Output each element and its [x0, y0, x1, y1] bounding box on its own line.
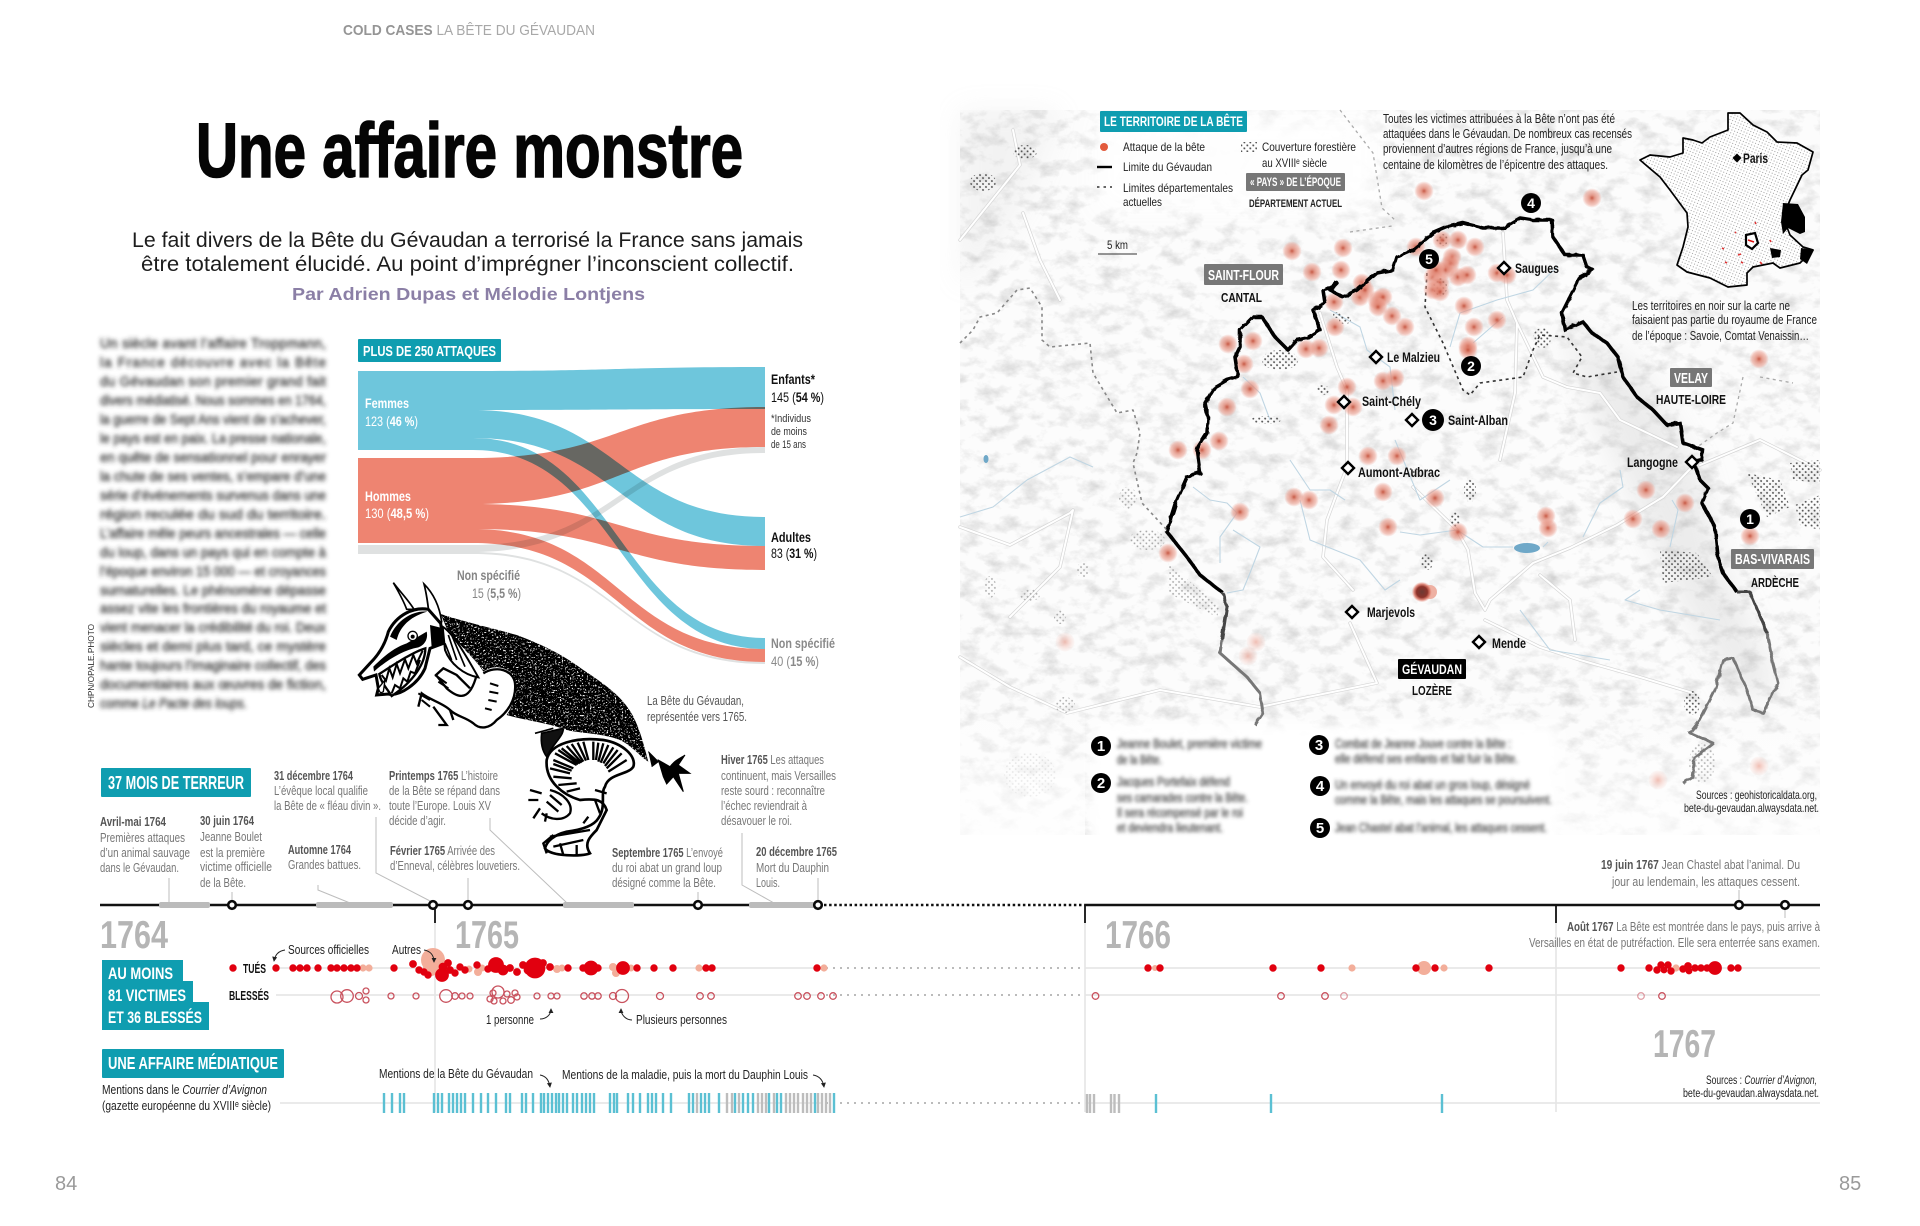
event: automne 1764: Grandes battues. [288, 858, 361, 872]
blurred article text: la guerre de Sept Ans vient de s’achever, [100, 412, 326, 427]
dots: autres sources [359, 948, 1680, 977]
horns [393, 583, 442, 623]
leader lines [169, 817, 1785, 918]
dots: tués, sources officielles [230, 958, 1741, 982]
year labels: 1766 [1105, 914, 1171, 957]
tag: 37 mois de terreur: 37 MOIS DE TERREUR [108, 773, 244, 793]
town names: Saint-Chély [1362, 394, 1421, 409]
annotation: sources officielles [274, 943, 369, 961]
town names [1358, 261, 1678, 651]
row labels: TUÉS [243, 961, 266, 976]
sources: timeline: Sources : Courrier d’Avignon, [1706, 1075, 1817, 1087]
media description: Mentions dans le Courrier d’Avignon [102, 1083, 267, 1097]
event: août 1767: Versailles en état de putréfaction. Elle sera enterrée sans examen. [1529, 936, 1820, 950]
label: velay [1656, 368, 1726, 407]
byline: Par Adrien Dupas et Mélodie Lontjens [292, 284, 645, 304]
blurred article text: surnaturelles. Le phénomène dépasse [100, 583, 326, 598]
numbered badges on map [1419, 193, 1760, 529]
label: bas-vivarais [1731, 549, 1814, 590]
media description [102, 1083, 271, 1113]
blurred article text: siècles et demi plus tard, ce mystère [100, 639, 326, 654]
event: 30 juin 1764: de la Bête. [200, 876, 246, 890]
label: saint-flour: SAINT-FLOUR [1208, 268, 1279, 284]
towns [1338, 262, 1698, 648]
event: printemps 1765 [389, 769, 500, 828]
key: blurred captions: elle défend ses enfants et fait fuir la Bête. [1335, 752, 1518, 766]
key: numbered badges: 1 [1097, 738, 1105, 755]
label: non spécifié centre [457, 567, 521, 601]
row lines [276, 968, 1820, 1103]
map panel: le territoire de la bête [960, 110, 1820, 849]
label: velay: HAUTE-LOIRE [1656, 392, 1726, 407]
tag: au moins 81 victimes: ET 36 BLESSÉS [108, 1008, 202, 1027]
callout: victimes: proviennent d’autres régions de France, jusqu’à une [1383, 142, 1612, 156]
annotation: sources officielles: Sources officielles [288, 943, 369, 957]
annotation: mentions de la bête [379, 1067, 550, 1087]
event: 20 décembre 1765: 20 décembre 1765 [756, 845, 837, 859]
blurred article text: comme Le Pacte des loups. [100, 696, 247, 711]
blurred article text: L’affaire mêle peurs ancestrales — celle [100, 526, 326, 541]
label: enfants: *Individus [771, 413, 811, 425]
key: blurred captions: de la Bête. [1117, 753, 1162, 767]
tag: 37 mois de terreur [101, 768, 251, 797]
caption: la bête [647, 693, 747, 724]
blurred article text: vient menacer la crédibilité du roi. Deux [100, 620, 326, 635]
label: adultes: Adultes [771, 529, 811, 545]
label: bas-vivarais: BAS-VIVARAIS [1735, 552, 1810, 568]
label: femmes: Femmes [365, 396, 409, 411]
tag: au moins 81 victimes: AU MOINS [108, 964, 173, 983]
annotation: autres: Autres [392, 943, 421, 957]
town names: Saugues [1515, 261, 1559, 276]
blurred article text: la chute de ses ventes, s’empare d’une [100, 469, 326, 484]
label: enfants: de 15 ans [771, 439, 806, 451]
callout: territoires en noir: de l’époque : Savoie, Comtat Venaissin… [1632, 329, 1809, 343]
town names: Mende [1492, 636, 1526, 651]
map tag: le territoire de la bête [1100, 111, 1247, 132]
row labels [229, 961, 269, 1003]
victims chart [102, 943, 1820, 1103]
label: bas-vivarais: ARDÈCHE [1751, 575, 1799, 590]
faint forest cover [984, 487, 1220, 797]
sankey nodes and flows [358, 367, 765, 664]
blurred article text: la France découvre avec la Bête [100, 355, 326, 370]
callout: victimes: Toutes les victimes attribuées à la Bête n’ont pas été [1383, 112, 1615, 126]
legend: pays de l'époque [1246, 173, 1345, 191]
legend: limite [1097, 160, 1212, 174]
map tag: le territoire de la bête: LE TERRITOIRE DE LA BÊTE [1104, 114, 1243, 129]
lake [984, 455, 1540, 553]
event: printemps 1765: décide d’agir. [389, 814, 446, 828]
body [441, 614, 648, 762]
label: non spécifié centre: 15 (5,5 %) [472, 585, 521, 601]
gévaudan in inset [1746, 233, 1758, 249]
key: blurred captions: comme la Bête, mais les attaques se poursuivent. [1335, 793, 1552, 807]
event: 30 juin 1764: est la première [200, 846, 265, 860]
annotation: plusieurs personnes [621, 1009, 727, 1027]
event: automne 1764 [288, 843, 361, 872]
callout: territoires en noir: faisaient pas partie du royaume de France [1632, 313, 1817, 327]
label: non spécifié droite: Non spécifié [771, 635, 835, 651]
standfirst: Le fait divers de la Bête du Gévaudan a terrorisé la France sans jamais [132, 229, 803, 252]
event: août 1767: Août 1767 La Bête est montrée dans le pays, puis arrive à [1567, 920, 1820, 934]
legend: couverture forestière: Couverture forestière [1262, 140, 1356, 154]
numbered badges on map: 5 [1425, 251, 1433, 267]
event: 19 juin 1767: 19 juin 1767 Jean Chastel abat l’animal. Du [1601, 858, 1800, 872]
event: avril-mai 1764: Avril-mai 1764 [100, 815, 166, 829]
event: 20 décembre 1765: Mort du Dauphin [756, 861, 829, 875]
tag: une affaire médiatique: UNE AFFAIRE MÉDIATIQUE [108, 1052, 278, 1073]
scale bar [1098, 238, 1137, 254]
event: 30 juin 1764 [200, 814, 272, 890]
header: running head: COLD CASES LA BÊTE DU GÉVAUDAN [343, 22, 595, 39]
key: numbered badges: 2 [1097, 775, 1105, 792]
high ground shading [960, 110, 1060, 290]
départemental limits [960, 110, 1793, 530]
town names: Saint-Alban [1448, 413, 1508, 428]
key: blurred captions: Combat de Jeanne Jouve contre la Bête : [1335, 737, 1511, 751]
label: enfants: 145 (54 %) [771, 389, 824, 405]
jaws and teeth [379, 648, 425, 696]
blurred article text: Un siècle avant l’affaire Troppmann, [100, 336, 326, 351]
event: février 1765 [390, 844, 520, 873]
key: blurred captions: Jeanne Boulet, première victime [1117, 737, 1262, 751]
circles: blessés [331, 986, 1665, 1004]
key: blurred captions [1117, 737, 1552, 835]
blurred article text: hante toujours l’imaginaire collectif, des [100, 658, 326, 673]
territories in black [1770, 203, 1814, 264]
blurred article text: documentaires aux œuvres de fiction, [100, 677, 326, 692]
label: velay: VELAY [1674, 371, 1708, 387]
blurred article text: en quête de sensationnel pour enrayer [100, 450, 326, 465]
blurred article text: du Gévaudan son premier grand fait [100, 374, 326, 389]
rear thigh and leg [545, 739, 634, 855]
event: hiver 1765: l’échec reviendrait à [721, 799, 807, 813]
main time axis [100, 901, 1820, 1112]
blurred article text [100, 336, 326, 711]
label: enfants: de moins [771, 426, 807, 438]
label: hommes: 130 (48,5 %) [365, 506, 429, 521]
label: adultes: 83 (31 %) [771, 545, 817, 561]
label: saint-flour: CANTAL [1221, 290, 1262, 305]
numbered badges on map: 4 [1527, 195, 1535, 211]
event: août 1767 [1529, 920, 1820, 950]
blurred article text: le pays est en paix. La presse nationale, [100, 431, 326, 446]
row labels: BLESSÉS [229, 988, 269, 1003]
event: 30 juin 1764: victime officielle [200, 860, 272, 874]
event: 31 décembre 1764 [274, 769, 381, 813]
key: numbered badges [1091, 735, 1330, 838]
tag: une affaire médiatique [102, 1049, 284, 1078]
inset map: france [1640, 113, 1814, 287]
year labels [100, 914, 1716, 1066]
legend [1097, 140, 1356, 210]
label: adultes [771, 529, 817, 561]
event: hiver 1765: reste sourd : reconnaître [721, 784, 825, 798]
numbered badges on map: 1 [1746, 511, 1754, 527]
callout: victimes: centaine de kilomètres de l’épicentre des attaques. [1383, 158, 1608, 172]
annotation: mentions de la maladie: Mentions de la maladie, puis la mort du Dauphin Louis [562, 1068, 808, 1082]
tag: plus de 250 attaques [358, 339, 501, 362]
blurred article text: série d’événements survenus dans une [100, 488, 326, 503]
key: blurred captions: Il sera récompensé par le roi [1117, 806, 1243, 820]
event: septembre 1765: désigné comme la Bête. [612, 876, 716, 890]
rivers [960, 267, 1720, 660]
timeline: 37 mois de terreur [100, 753, 1820, 1112]
sources: timeline: bete-du-gevaudan.alwaysdata.net. [1683, 1088, 1819, 1100]
key: numbered badges: 5 [1316, 820, 1324, 837]
sources: map: Sources : geohistoricaldata.org, [1696, 788, 1817, 802]
event: février 1765: d’Enneval, célèbres louvetiers. [390, 859, 520, 873]
paris [1732, 151, 1768, 166]
illustration: la bête [359, 583, 690, 855]
event: 19 juin 1767 [1601, 858, 1800, 889]
event: 31 décembre 1764: 31 décembre 1764 [274, 769, 353, 783]
town names: Langogne [1627, 455, 1678, 470]
media description: (gazette européenne du XVIIIᵉ siècle) [102, 1099, 271, 1113]
key: numbered badges: 4 [1316, 778, 1325, 795]
callout: victimes: attaquées dans le Gévaudan. De nombreux cas recensés [1383, 127, 1632, 141]
key: numbered badges: 3 [1315, 737, 1323, 754]
legend: couverture forestière [1241, 140, 1356, 170]
annotation: mentions de la bête: Mentions de la Bête du Gévaudan [379, 1067, 533, 1081]
annotation: autres [392, 943, 434, 962]
bars: mentions bleues [384, 1093, 1442, 1113]
numbered badges on map: 3 [1429, 412, 1437, 428]
attack points [1056, 182, 1768, 790]
town names: Le Malzieu [1387, 350, 1440, 365]
annotation: 1 personne: 1 personne [486, 1013, 534, 1027]
callout: victimes [1383, 112, 1632, 172]
bars: mentions grises [697, 1093, 1119, 1113]
media chart [102, 1049, 1819, 1113]
blurred article text: du loup, dans un pays qui en compte à [100, 545, 326, 560]
sources: map: bete-du-gevaudan.alwaysdata.net. [1684, 801, 1819, 815]
roads [960, 130, 1820, 713]
label: saint-flour [1204, 264, 1283, 305]
legend: limites départementales: Limites départementales [1123, 181, 1233, 195]
legend: limite: Limite du Gévaudan [1123, 160, 1212, 174]
year labels: 1764 [100, 914, 168, 957]
tag: plus de 250 attaques: PLUS DE 250 ATTAQUES [363, 343, 496, 360]
label: gévaudan: GÉVAUDAN [1402, 661, 1462, 677]
event: 20 décembre 1765 [756, 845, 837, 890]
event: avril-mai 1764: dans le Gévaudan. [100, 861, 179, 875]
tag: au moins 81 victimes [102, 960, 209, 1030]
label: non spécifié droite [771, 635, 835, 669]
town names: Aumont-Aubrac [1358, 465, 1440, 480]
blurred article text: l’époque environ 15 000 — et croyances [100, 564, 326, 579]
event: avril-mai 1764 [100, 815, 190, 875]
blurred article text: assez vite les frontières du royaume et [100, 601, 326, 616]
page number right: 85 [1839, 1173, 1861, 1195]
callout: territoires en noir: Les territoires en noir sur la carte ne [1632, 299, 1790, 313]
event: avril-mai 1764: Premières attaques [100, 831, 185, 845]
annotation: mentions de la maladie [562, 1068, 824, 1087]
page number left: 84 [55, 1173, 77, 1195]
legend: limites départementales [1097, 181, 1233, 209]
label: non spécifié droite: 40 (15 %) [771, 653, 819, 669]
map base relief [960, 110, 1820, 835]
label: gévaudan: LOZÈRE [1412, 683, 1452, 698]
event: septembre 1765: du roi abat un grand loup [612, 861, 722, 875]
limite du gévaudan [1167, 218, 1778, 783]
tag: au moins 81 victimes: 81 VICTIMES [108, 986, 186, 1005]
blurred article text: région reculée du sud du territoire. [100, 507, 326, 522]
event: septembre 1765: Septembre 1765 L’envoyé [612, 846, 723, 860]
key: blurred captions: Un envoyé du roi abat un gros loup, désigné [1335, 778, 1530, 792]
label: femmes: 123 (46 %) [365, 414, 418, 429]
event: automne 1764: Automne 1764 [288, 843, 351, 857]
event: printemps 1765: de la Bête se répand dans [389, 784, 500, 798]
event: printemps 1765: Printemps 1765 L’histoire [389, 769, 498, 783]
paris: Paris [1743, 151, 1768, 166]
label: gévaudan [1398, 659, 1466, 698]
label: femmes [365, 396, 418, 429]
event: avril-mai 1764: d’un animal sauvage [100, 846, 190, 860]
label: hommes: Hommes [365, 489, 411, 504]
sources: map [1684, 788, 1819, 815]
forest cover [970, 145, 1820, 783]
legend: limites départementales: actuelles [1123, 195, 1162, 209]
label: hommes [365, 489, 429, 521]
event: 31 décembre 1764: la Bête de « fléau divin ». [274, 799, 381, 813]
legend: pays de l'époque: « PAYS » DE L’ÉPOQUE [1250, 174, 1341, 189]
head [359, 609, 443, 695]
standfirst: être totalement élucidé. Au point d’imprégner l’inconscient collectif. [141, 253, 794, 276]
caption: la bête: La Bête du Gévaudan, [647, 693, 744, 708]
blurred article text: divers médiatisé. Nous sommes en 1764, [100, 393, 326, 408]
caption: la bête: représentée vers 1765. [647, 709, 747, 724]
event: 30 juin 1764: Jeanne Boulet [200, 830, 262, 844]
sources: timeline [1683, 1075, 1819, 1100]
event: 31 décembre 1764: L’évêque local qualifie [274, 784, 368, 798]
annotation: plusieurs personnes: Plusieurs personnes [636, 1013, 727, 1027]
label: non spécifié centre: Non spécifié [457, 567, 520, 583]
fade layers [960, 112, 1820, 849]
event: hiver 1765: désavouer le roi. [721, 814, 792, 828]
rear foot upper [528, 790, 571, 822]
event: 19 juin 1767: jour au lendemain, les attaques cessent. [1611, 875, 1800, 889]
event: hiver 1765: continuent, mais Versailles [721, 769, 836, 783]
event: février 1765: Février 1765 Arrivée des [390, 844, 495, 858]
label: enfants: Enfants* [771, 371, 815, 387]
key: blurred captions: ses camarades contre la Bête. [1117, 791, 1248, 805]
event: 20 décembre 1765: Louis. [756, 876, 780, 890]
event: printemps 1765: toute l’Europe. Louis XV [389, 799, 491, 813]
legend: attaque [1100, 140, 1205, 154]
numbered badges on map: 2 [1467, 358, 1475, 374]
legend: département actuel: DÉPARTEMENT ACTUEL [1249, 197, 1342, 210]
year labels: 1765 [455, 914, 519, 957]
photo credit: CHPN/OPALE.PHOTO [86, 624, 96, 708]
legend: attaque: Attaque de la bête [1123, 140, 1205, 154]
callout: territoires en noir [1632, 299, 1817, 343]
label: enfants [771, 371, 824, 451]
town names: Marjevols [1367, 605, 1415, 620]
legend: couverture forestière: au XVIIIᵉ siècle [1262, 156, 1327, 170]
event: hiver 1765 [721, 753, 836, 828]
year labels: 1767 [1653, 1023, 1716, 1066]
scale bar: 5 km [1107, 238, 1128, 252]
title: Une affaire monstre [196, 108, 743, 194]
key: blurred captions: et deviendra lieutenant. [1117, 821, 1223, 835]
tail [648, 752, 690, 792]
shoulder and arm [418, 668, 515, 727]
event: 30 juin 1764: 30 juin 1764 [200, 814, 254, 828]
sankey chart: attacks [358, 339, 835, 669]
event: septembre 1765 [612, 846, 723, 890]
key: blurred captions: Jean Chastel abat l’animal, les attaques cessent. [1335, 821, 1547, 835]
mane [443, 627, 478, 677]
standfirst [132, 229, 803, 276]
key: blurred captions: Jacques Portefaix défend [1117, 775, 1230, 789]
event: hiver 1765: Hiver 1765 Les attaques [721, 753, 824, 767]
